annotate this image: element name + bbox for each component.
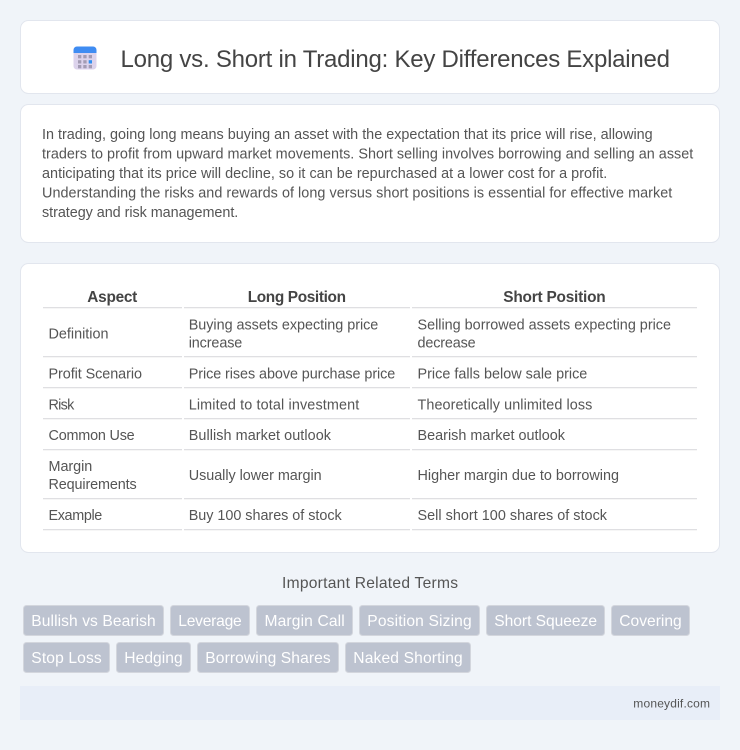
panel: introduction [20,104,720,242]
intro paragraph [42,127,693,221]
panel: comparison table [20,264,720,552]
tag: stop loss: Stop Loss [31,650,102,667]
intro paragraph: traders to profit from upward market movements. Short selling involves borrowing and selling an asset [42,146,693,162]
intro paragraph: Understanding the risks and rewards of long versus short positions is essential for effective market [42,185,672,201]
row: risk: Limited to total investment [189,397,359,413]
row: definition: increase [189,335,242,351]
tag: short squeeze: Short Squeeze [494,613,597,630]
row: common use: Bearish market outlook [418,428,566,444]
tag: naked shorting: Naked Shorting [353,650,463,667]
title: Long vs. Short in Trading: Key Differences Explained [120,46,670,73]
tag: leverage: Leverage [178,613,242,630]
row: profit scenario: Price rises above purchase price [189,366,395,382]
tag: position sizing: Position Sizing [367,613,472,630]
tag: covering: Covering [619,613,682,630]
row: common use: Bullish market outlook [189,428,332,444]
row: margin requirements: Requirements [48,477,137,493]
row: definition: decrease [418,335,476,351]
intro paragraph: strategy and risk management. [42,205,238,221]
tag: borrowing shares [198,642,338,672]
intro paragraph: In trading, going long means buying an asset with the expectation that its price will rise, allowing [42,127,653,143]
row: profit scenario: Profit Scenario [48,366,142,382]
row: risk: Theoretically unlimited loss [418,397,592,413]
tag: position sizing [360,606,480,636]
row: common use [43,428,697,450]
tag list: related terms [24,606,690,672]
row: example: Buy 100 shares of stock [189,508,342,524]
tag: margin call [256,606,352,636]
tag: bullish vs bearish: Bullish vs Bearish [31,613,156,630]
panel: title header [20,20,720,94]
row: definition: Buying assets expecting price [189,317,378,333]
row: common use: Common Use [48,428,135,444]
table header row: Short Position [503,289,606,306]
tag: short squeeze [486,606,604,636]
tag: hedging: Hedging [124,650,183,667]
table header row: Long Position [248,289,346,306]
tag: naked shorting [346,642,470,672]
heading: important related terms: Important Related Terms [282,575,458,592]
row: risk: Risk [48,397,75,413]
tag: covering [612,606,690,636]
row: margin requirements: Usually lower margin [189,468,322,484]
tag: borrowing shares: Borrowing Shares [205,650,331,667]
tag: hedging [116,642,190,672]
tag: margin call: Margin Call [264,613,345,630]
row: margin requirements: Higher margin due to borrowing [418,468,619,484]
table header row [43,289,697,308]
table header row: Aspect [87,289,137,306]
tag: stop loss [24,642,110,672]
tag: bullish vs bearish [24,606,164,636]
row: risk [43,397,697,419]
row: margin requirements [43,459,697,499]
icon: calendar [74,46,96,70]
footer: source site: moneydif.com [633,696,710,710]
row: definition: Definition [48,326,108,342]
row: example [43,508,697,530]
row: example: Sell short 100 shares of stock [418,508,608,524]
intro paragraph: anticipating that its price will decline, so it can be repurchased at a lower cost for a profit. [42,166,607,182]
row: margin requirements: Margin [48,459,92,475]
row: profit scenario: Price falls below sale price [418,366,587,382]
tag: leverage [170,606,250,636]
row: definition: Selling borrowed assets expecting price [418,317,671,333]
row: example: Example [48,508,102,524]
row: definition [43,317,697,357]
row: profit scenario [43,366,697,388]
footer bar [20,686,720,720]
